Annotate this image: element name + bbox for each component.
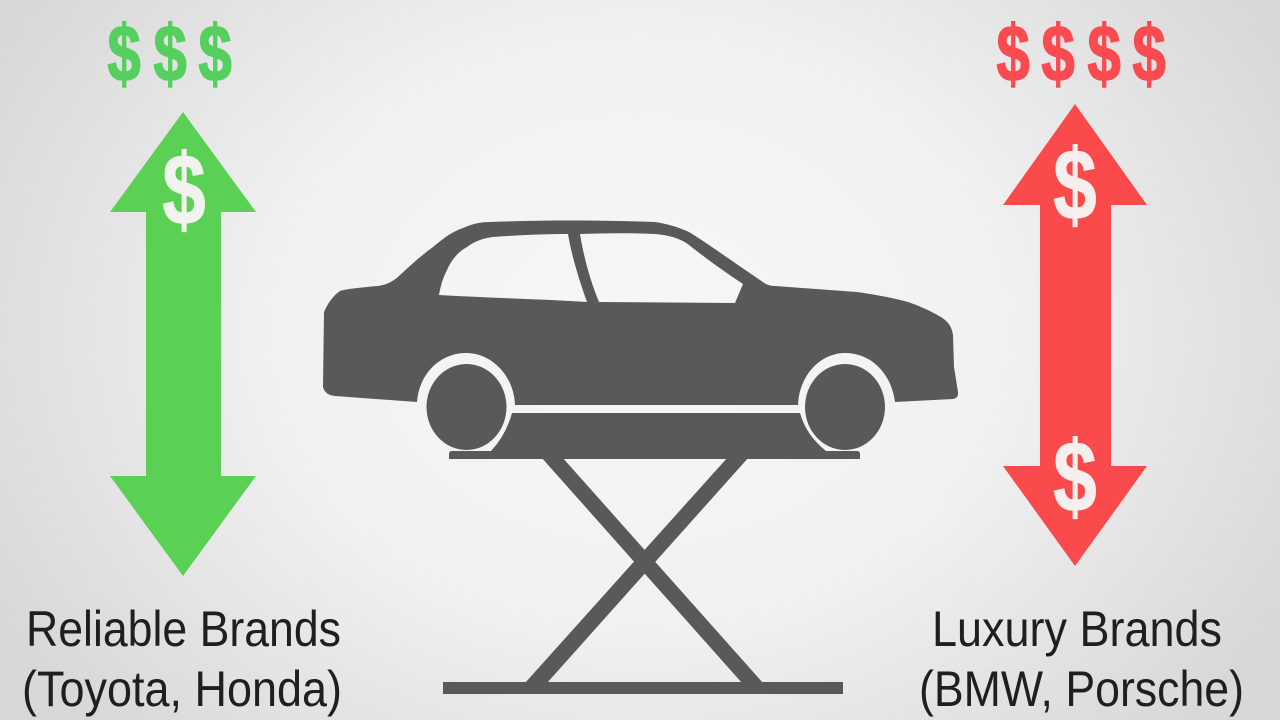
green dollar signs: reliable brands cost: $ [153, 9, 187, 98]
label: luxury brands: Luxury Brands [932, 601, 1222, 657]
red double arrow with dollars [1003, 104, 1147, 566]
rear wheel [426, 364, 506, 450]
lift base [443, 682, 843, 694]
red double arrow with dollars: $ [1053, 130, 1097, 241]
red dollar signs: luxury brands cost: $ [1087, 9, 1121, 98]
green double arrow with dollar [110, 112, 256, 576]
red dollar signs: luxury brands cost: $ [1132, 9, 1166, 98]
car silhouette [323, 220, 958, 451]
red dollar signs: luxury brands cost: $ [1041, 9, 1075, 98]
label: reliable brands: Reliable Brands [26, 601, 341, 657]
sill and lower beam [491, 413, 826, 451]
lift scissor arms [541, 457, 763, 683]
green dollar signs: reliable brands cost: $ [198, 9, 232, 98]
label: reliable brands [22, 601, 342, 717]
lift platform [449, 451, 860, 459]
green double arrow with dollar: $ [162, 135, 206, 246]
green dollar signs: reliable brands cost: $ [107, 9, 141, 98]
front wheel [805, 364, 885, 450]
car body [323, 220, 958, 405]
red double arrow with dollars: $ [1053, 422, 1097, 533]
red dollar signs: luxury brands cost: $ [996, 9, 1030, 98]
red dollar signs: luxury brands cost [996, 9, 1166, 98]
label: luxury brands [919, 601, 1244, 717]
label: luxury brands: (BMW, Porsche) [919, 661, 1244, 717]
label: reliable brands: (Toyota, Honda) [22, 661, 342, 717]
green dollar signs: reliable brands cost [107, 9, 232, 98]
scissor lift [443, 451, 860, 694]
